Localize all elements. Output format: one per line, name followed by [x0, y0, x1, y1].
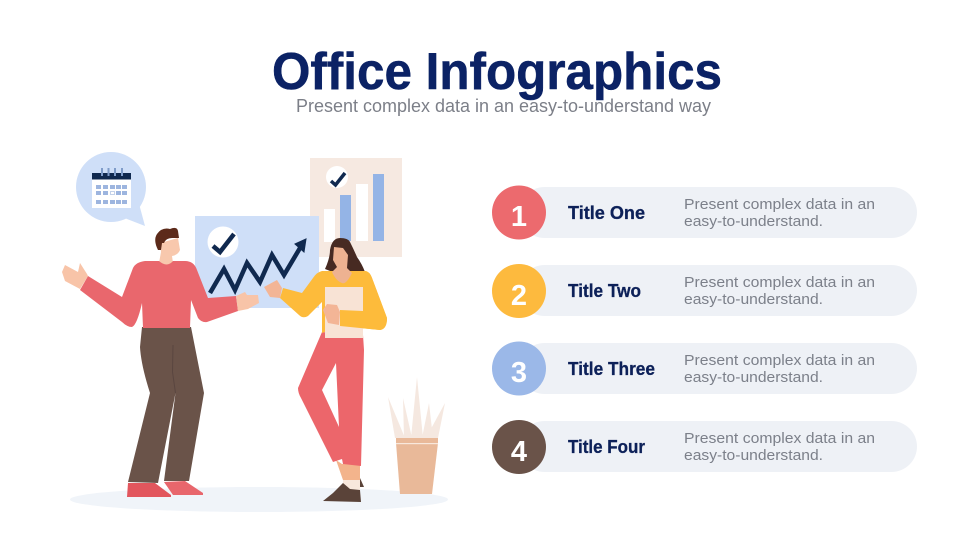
item text: Present complex data in an	[684, 352, 875, 369]
item text: Present complex data in an	[684, 274, 875, 291]
hands	[62, 263, 88, 289]
item text: Present complex data in an	[684, 430, 875, 447]
item title: Title One	[568, 203, 645, 223]
badge	[492, 186, 546, 240]
hand	[264, 280, 282, 298]
plant	[388, 377, 445, 494]
pill	[519, 265, 917, 316]
item text: easy-to-understand.	[684, 291, 823, 308]
back shoe	[358, 478, 364, 487]
item 4	[492, 420, 917, 474]
face and neck	[332, 247, 352, 283]
item text: Present complex data in an	[684, 196, 875, 213]
item 2: 2	[511, 280, 527, 312]
trousers	[128, 327, 204, 483]
item title: Title Four	[568, 437, 645, 457]
shoes	[164, 481, 203, 495]
item 4: 4	[511, 436, 527, 468]
badge	[492, 420, 546, 474]
item 2	[492, 264, 917, 318]
item 1	[492, 186, 917, 240]
shirt	[280, 271, 387, 333]
woman figure	[264, 238, 387, 502]
item 3: 3	[511, 357, 527, 389]
item title: Title Two	[568, 281, 641, 301]
man figure	[62, 228, 259, 497]
item text: easy-to-understand.	[684, 213, 823, 230]
bar chart board	[310, 158, 402, 257]
ground shadow	[70, 487, 448, 512]
ankles	[336, 460, 360, 480]
neck and face	[159, 238, 180, 266]
badge	[492, 342, 546, 396]
shoe	[323, 483, 361, 502]
subtitle: Present complex data in an easy-to-understand way	[296, 96, 711, 116]
badge	[492, 264, 546, 318]
shirt	[80, 261, 238, 328]
icon: calendar speech bubble	[76, 152, 146, 226]
hair	[155, 228, 179, 250]
pill	[519, 421, 917, 472]
item text: easy-to-understand.	[684, 369, 823, 386]
hair	[325, 238, 365, 274]
item title: Title Three	[568, 359, 655, 379]
trousers	[298, 332, 364, 466]
item text: easy-to-understand.	[684, 447, 823, 464]
arm over folder	[340, 272, 387, 330]
item 1: 1	[511, 201, 527, 233]
line chart board	[195, 216, 319, 308]
pill	[519, 343, 917, 394]
pill	[519, 187, 917, 238]
title: Office Infographics	[272, 43, 722, 101]
folder	[325, 287, 363, 338]
item 3	[492, 342, 917, 396]
